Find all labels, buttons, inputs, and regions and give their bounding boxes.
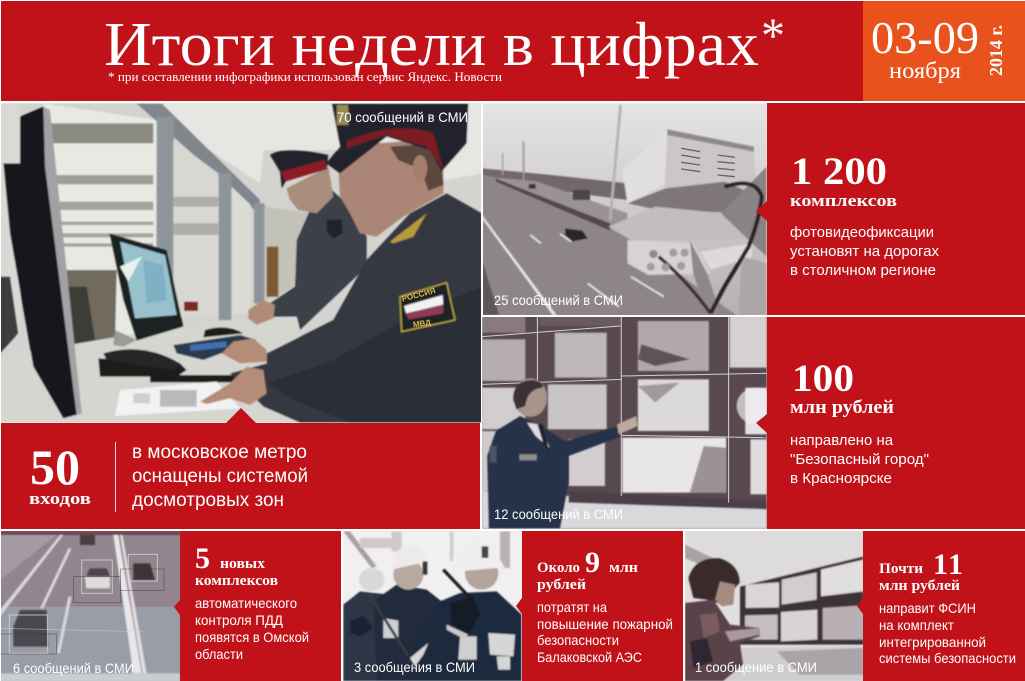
media count: 70 сообщений в СМИ — [337, 109, 468, 125]
front officer cap — [326, 103, 468, 173]
panel: 1200 complexes — [756, 103, 1025, 315]
description: на комплект — [879, 617, 955, 633]
unit line two: рублей — [537, 577, 586, 593]
header red band — [1, 1, 863, 101]
photo: traffic tracking — [0, 530, 182, 681]
description: в московское метро — [132, 442, 307, 463]
date block — [863, 1, 1025, 101]
unit: млн — [609, 560, 638, 576]
camera housing — [623, 153, 665, 204]
photo: operator at monitors — [680, 528, 865, 681]
big number: 5 — [195, 542, 210, 575]
shoulder patch — [400, 283, 455, 332]
unit line two: комплексов — [195, 573, 278, 589]
title: Итоги недели в цифрах — [104, 11, 759, 79]
panel: 100 million — [756, 317, 1025, 529]
header banner — [1, 1, 863, 101]
footnote: * при составлении инфографики использован сервис Яндекс. Новости — [108, 69, 502, 84]
unit: входов — [29, 489, 91, 508]
description — [790, 224, 939, 279]
unit: млн рублей — [879, 578, 960, 594]
media count: 25 сообщений в СМИ — [494, 292, 623, 308]
woman jacket — [685, 600, 760, 681]
description: автоматического — [195, 595, 297, 611]
woman hair — [688, 558, 740, 605]
red panel background — [180, 531, 341, 681]
unit: млн рублей — [790, 397, 894, 418]
panel: 9 million — [516, 531, 683, 681]
description: области — [195, 646, 243, 662]
panel: road camera photo — [482, 100, 769, 317]
description: направит ФСИН — [879, 600, 976, 616]
stripes — [383, 618, 398, 638]
description: досмотровых зон — [132, 490, 284, 511]
panel: traffic cams photo — [0, 530, 182, 681]
photo: officers at monitors — [0, 100, 482, 423]
red panel background — [767, 317, 1025, 529]
photo: roadside camera — [482, 100, 769, 317]
media count: 1 сообщение в СМИ — [695, 659, 817, 675]
rear officer — [270, 188, 367, 330]
red panel background — [522, 531, 683, 681]
description: в Красноярске — [790, 470, 892, 487]
photo: officers at monitors: МВД — [412, 318, 432, 329]
date orange background — [863, 1, 1025, 101]
month: ноября — [889, 58, 961, 83]
description: повышение пожарной — [537, 616, 673, 632]
pointer arrow — [857, 598, 863, 614]
description: интегрированной — [879, 634, 986, 650]
panel: police photo — [0, 100, 482, 423]
panel: 5 complexes — [174, 531, 341, 681]
description: контроля ПДД — [195, 612, 283, 628]
description: оснащены системой — [132, 466, 308, 487]
red panel background — [863, 531, 1025, 681]
pointer arrow — [756, 414, 767, 433]
description — [790, 432, 929, 487]
pointer arrow — [174, 600, 180, 615]
front firefighter — [410, 591, 522, 681]
officer — [487, 416, 621, 529]
description: направлено на — [790, 432, 894, 449]
middle firefighter — [373, 585, 442, 681]
description — [879, 600, 1016, 666]
big number: 100 — [792, 357, 854, 400]
description: Балаковской АЭС — [537, 649, 642, 665]
description — [537, 599, 673, 665]
photo: firefighters — [340, 528, 523, 681]
front officer face — [338, 140, 443, 237]
red panel background — [767, 103, 1025, 315]
unit line one: новых — [220, 556, 266, 572]
back firefighter — [359, 568, 384, 591]
description: безопасности — [537, 632, 619, 648]
prefix: Около — [537, 560, 580, 576]
description — [195, 595, 309, 662]
media count: 6 сообщений в СМИ — [13, 660, 134, 676]
panel: monitoring room photo — [680, 528, 865, 681]
panel: 11 million — [857, 531, 1025, 681]
big number: 11 — [933, 548, 963, 581]
description: появятся в Омской — [195, 629, 309, 645]
year: 2014 г. — [986, 25, 1006, 76]
description — [132, 442, 308, 511]
title asterisk: * — [761, 7, 785, 63]
big number: 1 200 — [791, 150, 887, 193]
arrow up — [226, 408, 256, 423]
panel: 50 entrances — [1, 423, 480, 529]
description: системы безопасности — [879, 650, 1016, 666]
date range: 03-09 — [871, 13, 979, 63]
panel: control room photo — [482, 316, 775, 533]
red panel background — [1, 423, 480, 529]
photo: officer at video wall — [482, 316, 775, 533]
description: в столичном регионе — [790, 262, 936, 279]
description: "Безопасный город" — [790, 451, 929, 468]
media count: 12 сообщений в СМИ — [494, 506, 623, 522]
panel: firefighters photo — [340, 528, 523, 681]
big number 50: 50 — [30, 439, 80, 495]
big number: 9 — [585, 546, 600, 579]
front officer body — [230, 193, 482, 423]
front officer hands — [222, 338, 267, 363]
prefix: Почти — [879, 561, 923, 577]
unit: комплексов — [790, 191, 897, 210]
description: потратят на — [537, 599, 607, 615]
media count: 3 сообщения в СМИ — [354, 659, 475, 675]
pointer arrow — [756, 201, 767, 221]
description: фотовидеофиксации — [790, 224, 934, 241]
patch lettering: РОССИЯ — [401, 286, 437, 304]
badge glint — [337, 105, 348, 125]
pointer arrow — [516, 598, 522, 614]
description: установят на дорогах — [790, 243, 939, 260]
divider — [115, 442, 116, 512]
